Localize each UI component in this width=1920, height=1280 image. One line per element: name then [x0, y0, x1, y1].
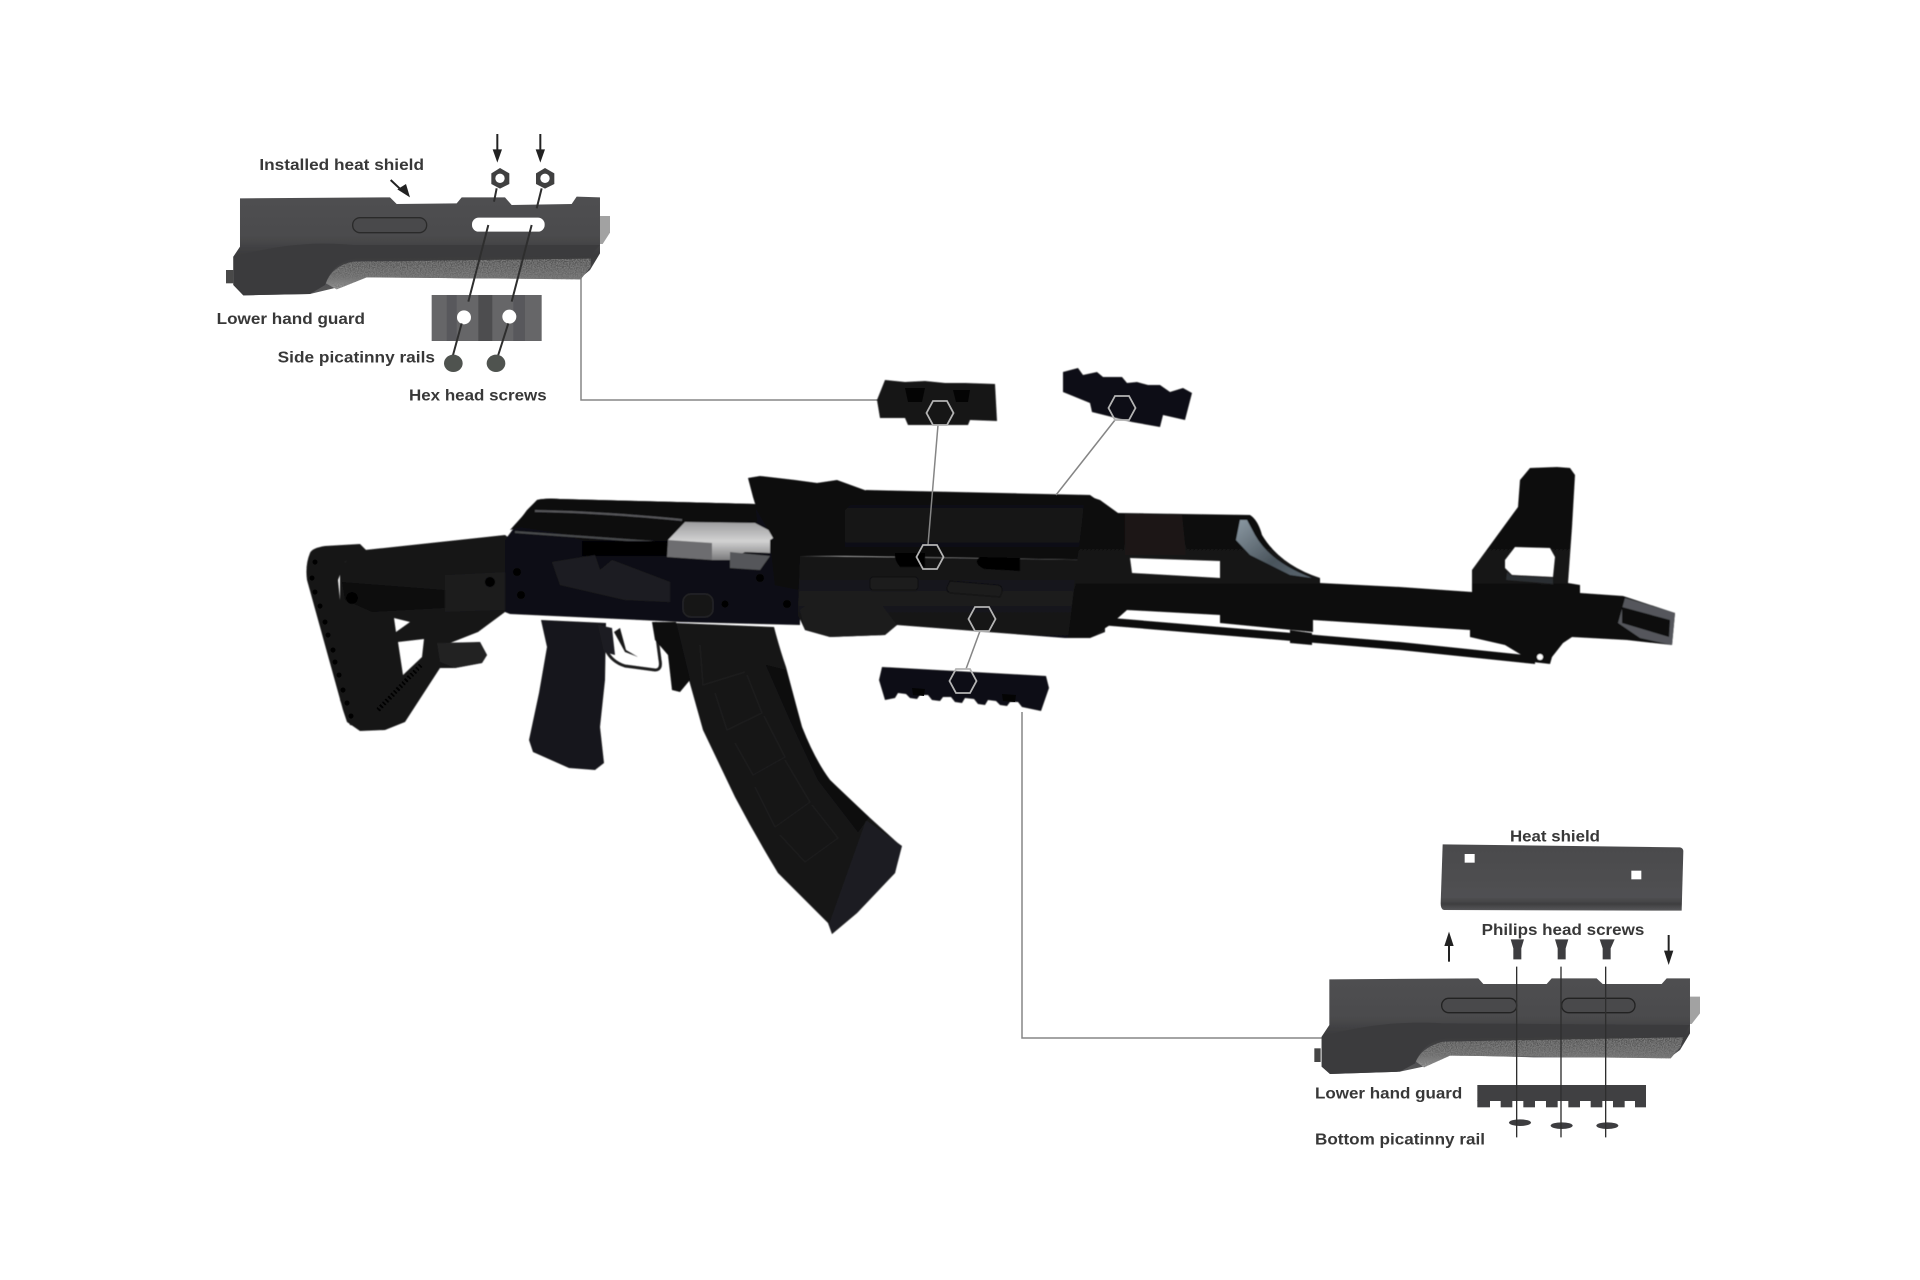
cleaning rod: [1100, 617, 1535, 664]
bottom rail: [879, 667, 1049, 711]
hexagon markers and leader lines: [916, 396, 1136, 693]
label: side picatinny rails: Side picatinny rails: [278, 350, 435, 367]
trigger guard and trigger: [598, 622, 690, 692]
panel: heat shield and bottom rail installation detail: [1314, 829, 1700, 1148]
lower hand guard: [798, 553, 1105, 638]
pistol grip: [529, 620, 606, 770]
lower hand guard illustration: [226, 197, 610, 295]
magazine: [676, 623, 902, 934]
label: heat shield: Heat shield: [1510, 829, 1600, 846]
rifle: [306, 467, 1675, 934]
hex nuts: [491, 168, 554, 189]
adjustable stock: [306, 535, 512, 731]
label: bottom picatinny rail: Bottom picatinny rail: [1315, 1131, 1485, 1148]
selector lever: [552, 555, 670, 602]
butt pad: [306, 544, 385, 731]
callout connector: upper left detail to side rail: [581, 276, 878, 400]
arrows: [391, 134, 545, 197]
label: lower hand guard: Lower hand guard: [1315, 1085, 1462, 1102]
philips head screws: [1509, 939, 1618, 1129]
bottom picatinny rail illustration: [1477, 1085, 1646, 1107]
arrows: [1444, 932, 1673, 965]
side rail, right: [1063, 368, 1192, 427]
label: lower hand guard: Lower hand guard: [217, 311, 365, 328]
side rail, left: [877, 380, 997, 425]
label: installed heat shield: Installed heat shield: [259, 157, 424, 174]
callout connector: bottom rail to lower right detail: [1022, 712, 1322, 1038]
label: philips head screws: Philips head screws: [1482, 922, 1645, 939]
label: hex head screws: Hex head screws: [409, 388, 547, 405]
receiver: [505, 499, 800, 625]
heat shield plate: [1441, 844, 1683, 911]
panel: side rail installation detail: [217, 134, 610, 405]
rail mounting slots: [905, 388, 1016, 702]
upper hand guard: [845, 490, 1107, 560]
hex head screws: [444, 355, 505, 372]
lower hand guard illustration: [1314, 978, 1700, 1074]
bolt: [668, 522, 778, 560]
flash hider: [1618, 598, 1675, 645]
side picatinny rail illustration: [432, 295, 542, 341]
rear sight: [748, 476, 870, 556]
barrel, gas block and front sight: [1068, 467, 1675, 664]
assembly guide lines: [452, 188, 542, 360]
assembly guide lines: [1517, 967, 1606, 1137]
